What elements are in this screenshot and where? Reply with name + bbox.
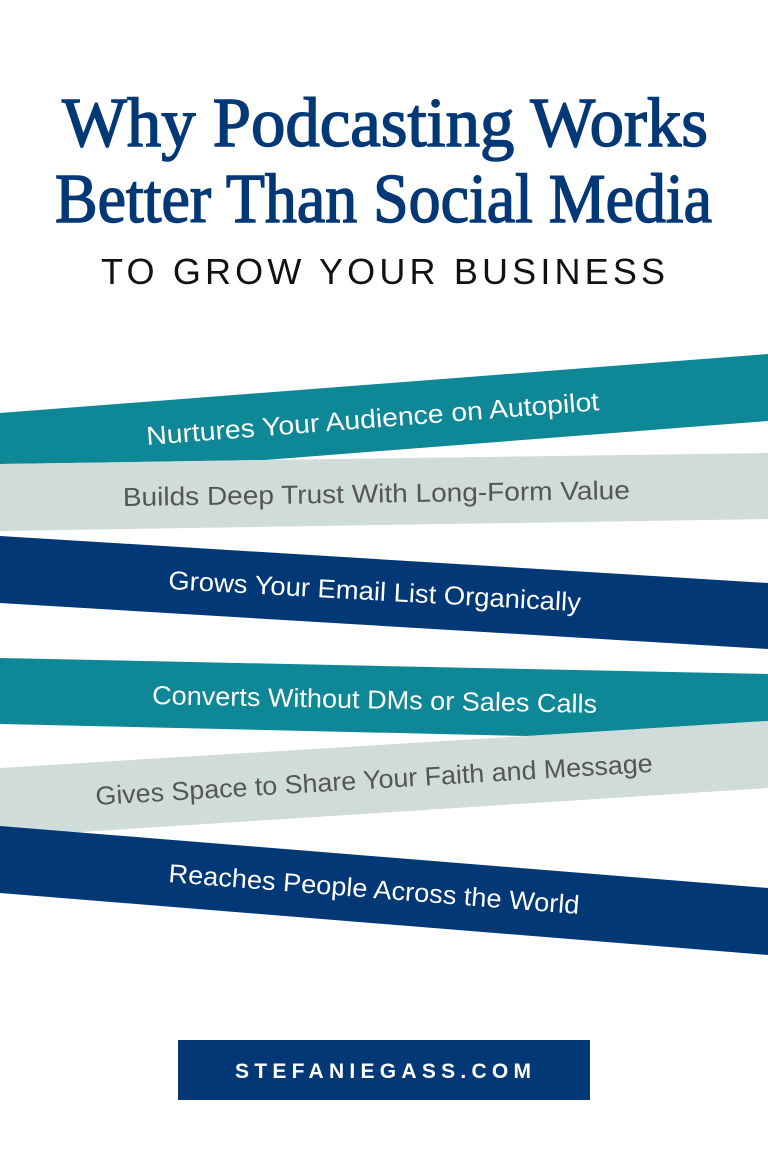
band: converts without DMs xyxy=(0,658,768,736)
band: gives space to share xyxy=(0,721,768,837)
band: reaches people: Reaches People Across the World xyxy=(168,858,581,920)
band: builds deep trust xyxy=(0,453,768,531)
subtitle: TO GROW YOUR BUSINESS xyxy=(101,251,665,292)
title: Why Podcasting Works xyxy=(62,85,708,162)
band: builds deep trust: Builds Deep Trust With Long-Form Value xyxy=(123,475,630,512)
band: nurtures your audience xyxy=(0,354,768,464)
band: gives space to share: Gives Space to Share Your Faith and Message xyxy=(95,748,653,811)
band: converts without DMs: Converts Without DMs or Sales Calls xyxy=(152,680,597,719)
title xyxy=(55,85,712,238)
footer: website button xyxy=(178,1040,590,1100)
title: Better Than Social Media xyxy=(55,161,712,238)
band: grows your email list xyxy=(0,536,768,649)
band: reaches people xyxy=(0,826,768,955)
footer: website button: STEFANIEGASS.COM xyxy=(235,1060,531,1083)
band: nurtures your audience: Nurtures Your Audience on Autopilot xyxy=(145,386,601,451)
band: grows your email list: Grows Your Email List Organically xyxy=(168,565,582,617)
